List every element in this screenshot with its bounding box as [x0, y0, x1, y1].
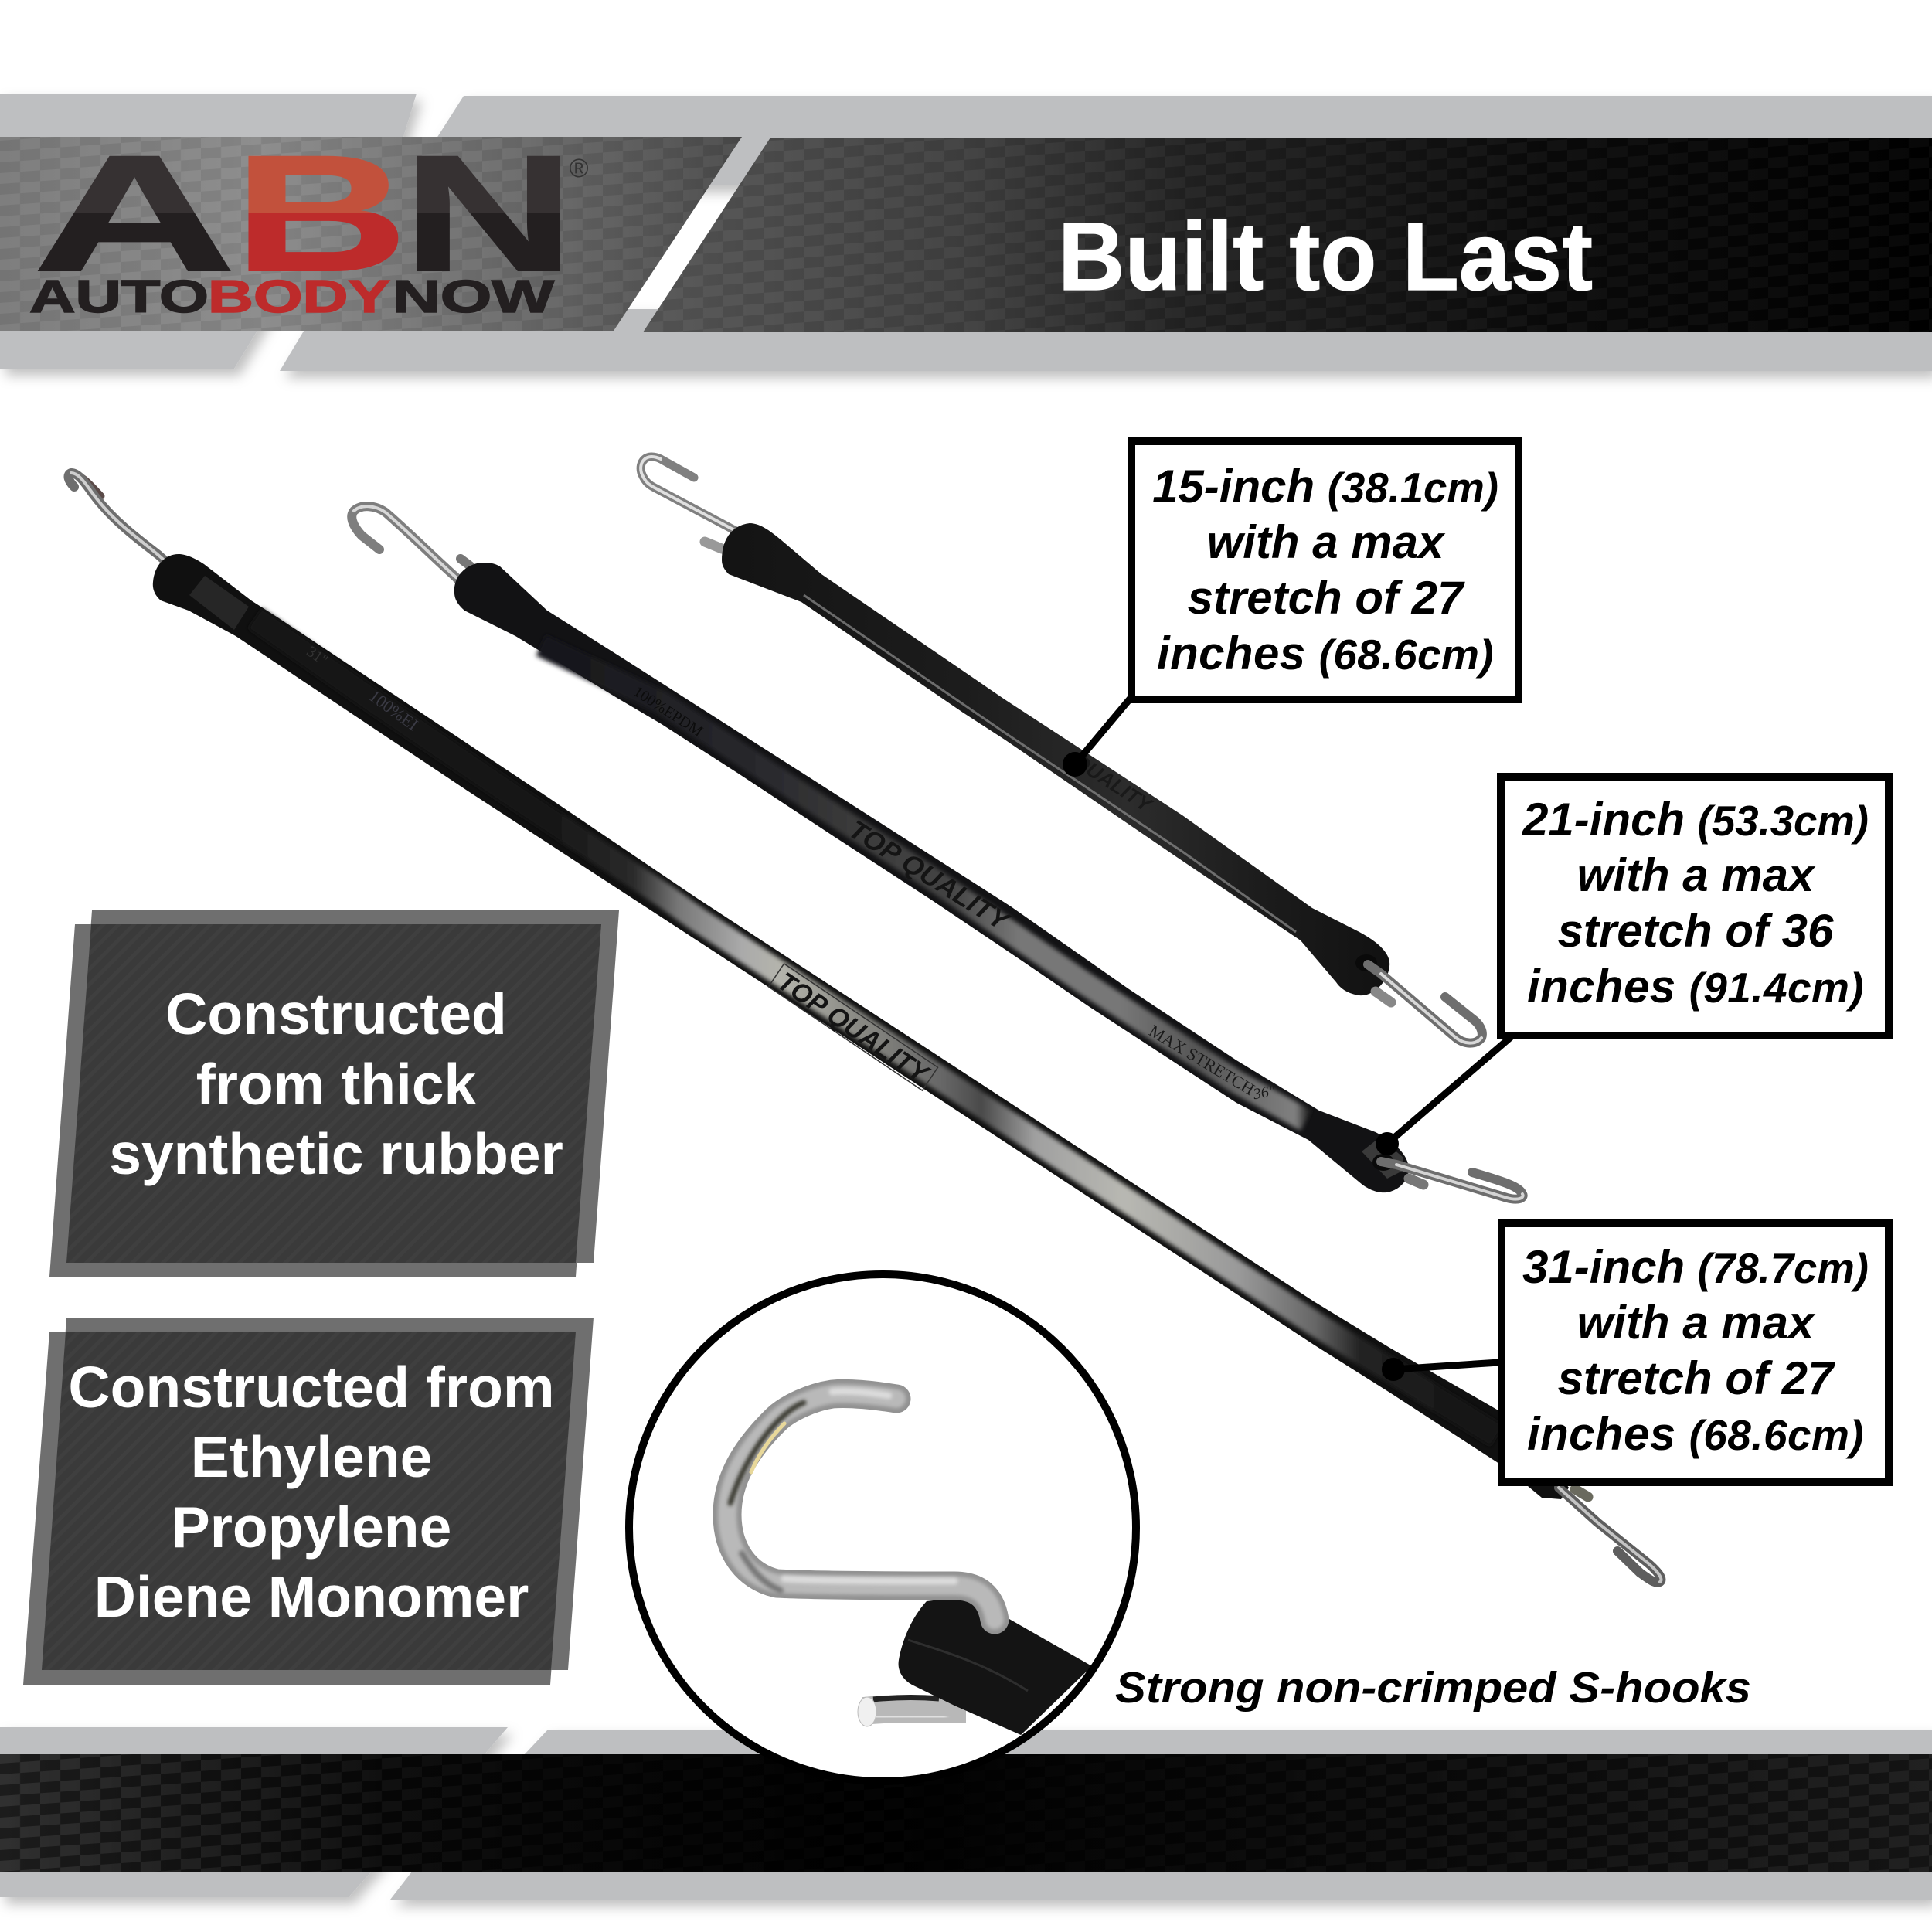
callout box 21: [1501, 777, 1889, 1036]
callout text 21: inches (91.4cm): [1527, 961, 1864, 1012]
detail circle: S-hook close-up: [629, 1274, 1136, 1781]
footer grey stripes: [0, 1727, 1932, 1900]
bottom hook 21: [1381, 1162, 1523, 1199]
label 36 inch mark: 36": [1251, 1083, 1277, 1103]
bottom hook 15: [1368, 964, 1482, 1043]
leader dot 31: [1382, 1358, 1405, 1381]
label TOP QUALITY on 21: TOP QUALITY: [843, 815, 1016, 937]
callout box 31: [1502, 1223, 1889, 1482]
label QUALITY on 15: QUALITY: [1069, 749, 1158, 818]
leader dot 15: [1063, 752, 1087, 777]
callout text 21: [1522, 794, 1869, 1012]
end tab facet 31: [189, 576, 249, 630]
logo letter A: A: [32, 121, 236, 306]
leader line 21: [1387, 1037, 1511, 1144]
label TOP QUALITY on 31: TOP QUALITY: [772, 967, 935, 1090]
leader line 31: [1393, 1362, 1499, 1369]
rubber band 21: [454, 563, 1409, 1192]
leader dot 21: [1376, 1132, 1399, 1155]
band highlight 15: [804, 595, 1296, 932]
band sheen 21: [541, 645, 1306, 1121]
panel text: Diene Monomer: [94, 1564, 529, 1629]
band sheen 31: [255, 618, 1497, 1436]
logo letter B: B: [233, 121, 408, 306]
callout text 15: 15-inch (38.1cm): [1152, 461, 1498, 512]
callout text 15: stretch of 27: [1188, 572, 1465, 624]
logo: ABN AutoBodyNow: [29, 121, 589, 322]
bottom hook 31: [1559, 1488, 1661, 1583]
callout text 31: inches (68.6cm): [1527, 1408, 1864, 1460]
label 31 inch mark: 31": [304, 643, 331, 669]
callout text 15: inches (68.6cm): [1157, 628, 1494, 679]
panel text: Propylene: [172, 1495, 451, 1560]
callout text 15: with a max: [1207, 516, 1446, 568]
header grey stripes: [0, 94, 1932, 371]
eyelet 21: [1372, 1154, 1394, 1171]
label 100% EPDM mark: 100%EI: [366, 686, 422, 734]
registered mark: ®: [569, 154, 589, 183]
panel frame back: [49, 910, 619, 1277]
callout text 31: [1522, 1241, 1869, 1460]
panel: thick synthetic rubber: [49, 910, 619, 1277]
panel text: [109, 981, 563, 1186]
close-up contents: [727, 1391, 1092, 1735]
header logo panel: [0, 137, 742, 331]
logo wordmark AUTO: AUTO: [29, 271, 209, 322]
panel text: [68, 1355, 555, 1629]
top hook 15: [641, 457, 751, 549]
lower pin: [864, 1698, 966, 1717]
header title panel: [643, 138, 1932, 332]
circle background: [629, 1274, 1136, 1781]
circle ring: [629, 1274, 1136, 1781]
panel text: Ethylene: [191, 1424, 432, 1489]
callout box 15: [1131, 441, 1519, 699]
pin end cap: [858, 1697, 876, 1726]
end tab facet 21: [1362, 1138, 1403, 1179]
panel: EPDM: [23, 1318, 594, 1685]
callout text 31: stretch of 27: [1558, 1352, 1835, 1404]
callout text 31: with a max: [1577, 1297, 1816, 1349]
panel dark face: [42, 1332, 576, 1670]
top hook 31: [69, 473, 179, 581]
strap: 31-inch: [69, 473, 1661, 1583]
leader line 15: [1075, 697, 1131, 764]
callout: 15-inch: [1063, 441, 1519, 777]
title: Built to Last: [1058, 203, 1593, 311]
top hook 21: [352, 506, 476, 593]
caption: S-hooks: Strong non-crimped S-hooks: [1115, 1663, 1751, 1713]
panel frame back: [23, 1318, 594, 1685]
strap: 15-inch: [641, 457, 1482, 1043]
callout: 31-inch: [1382, 1223, 1889, 1482]
label MAX STRETCH on 21: MAX STRETCH: [1146, 1021, 1258, 1099]
footer carbon bar: [0, 1754, 1932, 1872]
callout text 21: 21-inch (53.3cm): [1522, 794, 1869, 845]
logo wordmark BODY: BODY: [208, 271, 390, 322]
rubber end: [899, 1596, 1092, 1735]
callout text 21: with a max: [1577, 849, 1816, 901]
panel text: from thick: [196, 1052, 477, 1117]
rubber band 15: [722, 523, 1389, 995]
metal S-hook: [727, 1391, 995, 1620]
panel dark face: [66, 924, 601, 1263]
rubber band 31: [153, 554, 1569, 1499]
callout: 21-inch: [1376, 777, 1889, 1155]
strap: 21-inch: [352, 506, 1523, 1199]
label 100% EPDM on 21: 100%EPDM: [631, 683, 706, 740]
callout text 31: 31-inch (78.7cm): [1522, 1241, 1869, 1293]
header band: [0, 94, 1932, 371]
eyelet 15: [1355, 954, 1377, 971]
callout text 21: stretch of 36: [1558, 905, 1834, 957]
logo wordmark NOW: NOW: [393, 271, 554, 322]
logo letter N: N: [402, 121, 575, 306]
panel text: Constructed: [165, 981, 507, 1046]
callout text 15: [1152, 461, 1498, 679]
footer band: [0, 1727, 1932, 1900]
rubber seam: [908, 1640, 1028, 1691]
panel text: synthetic rubber: [109, 1121, 563, 1186]
panel text: Constructed from: [68, 1355, 555, 1420]
